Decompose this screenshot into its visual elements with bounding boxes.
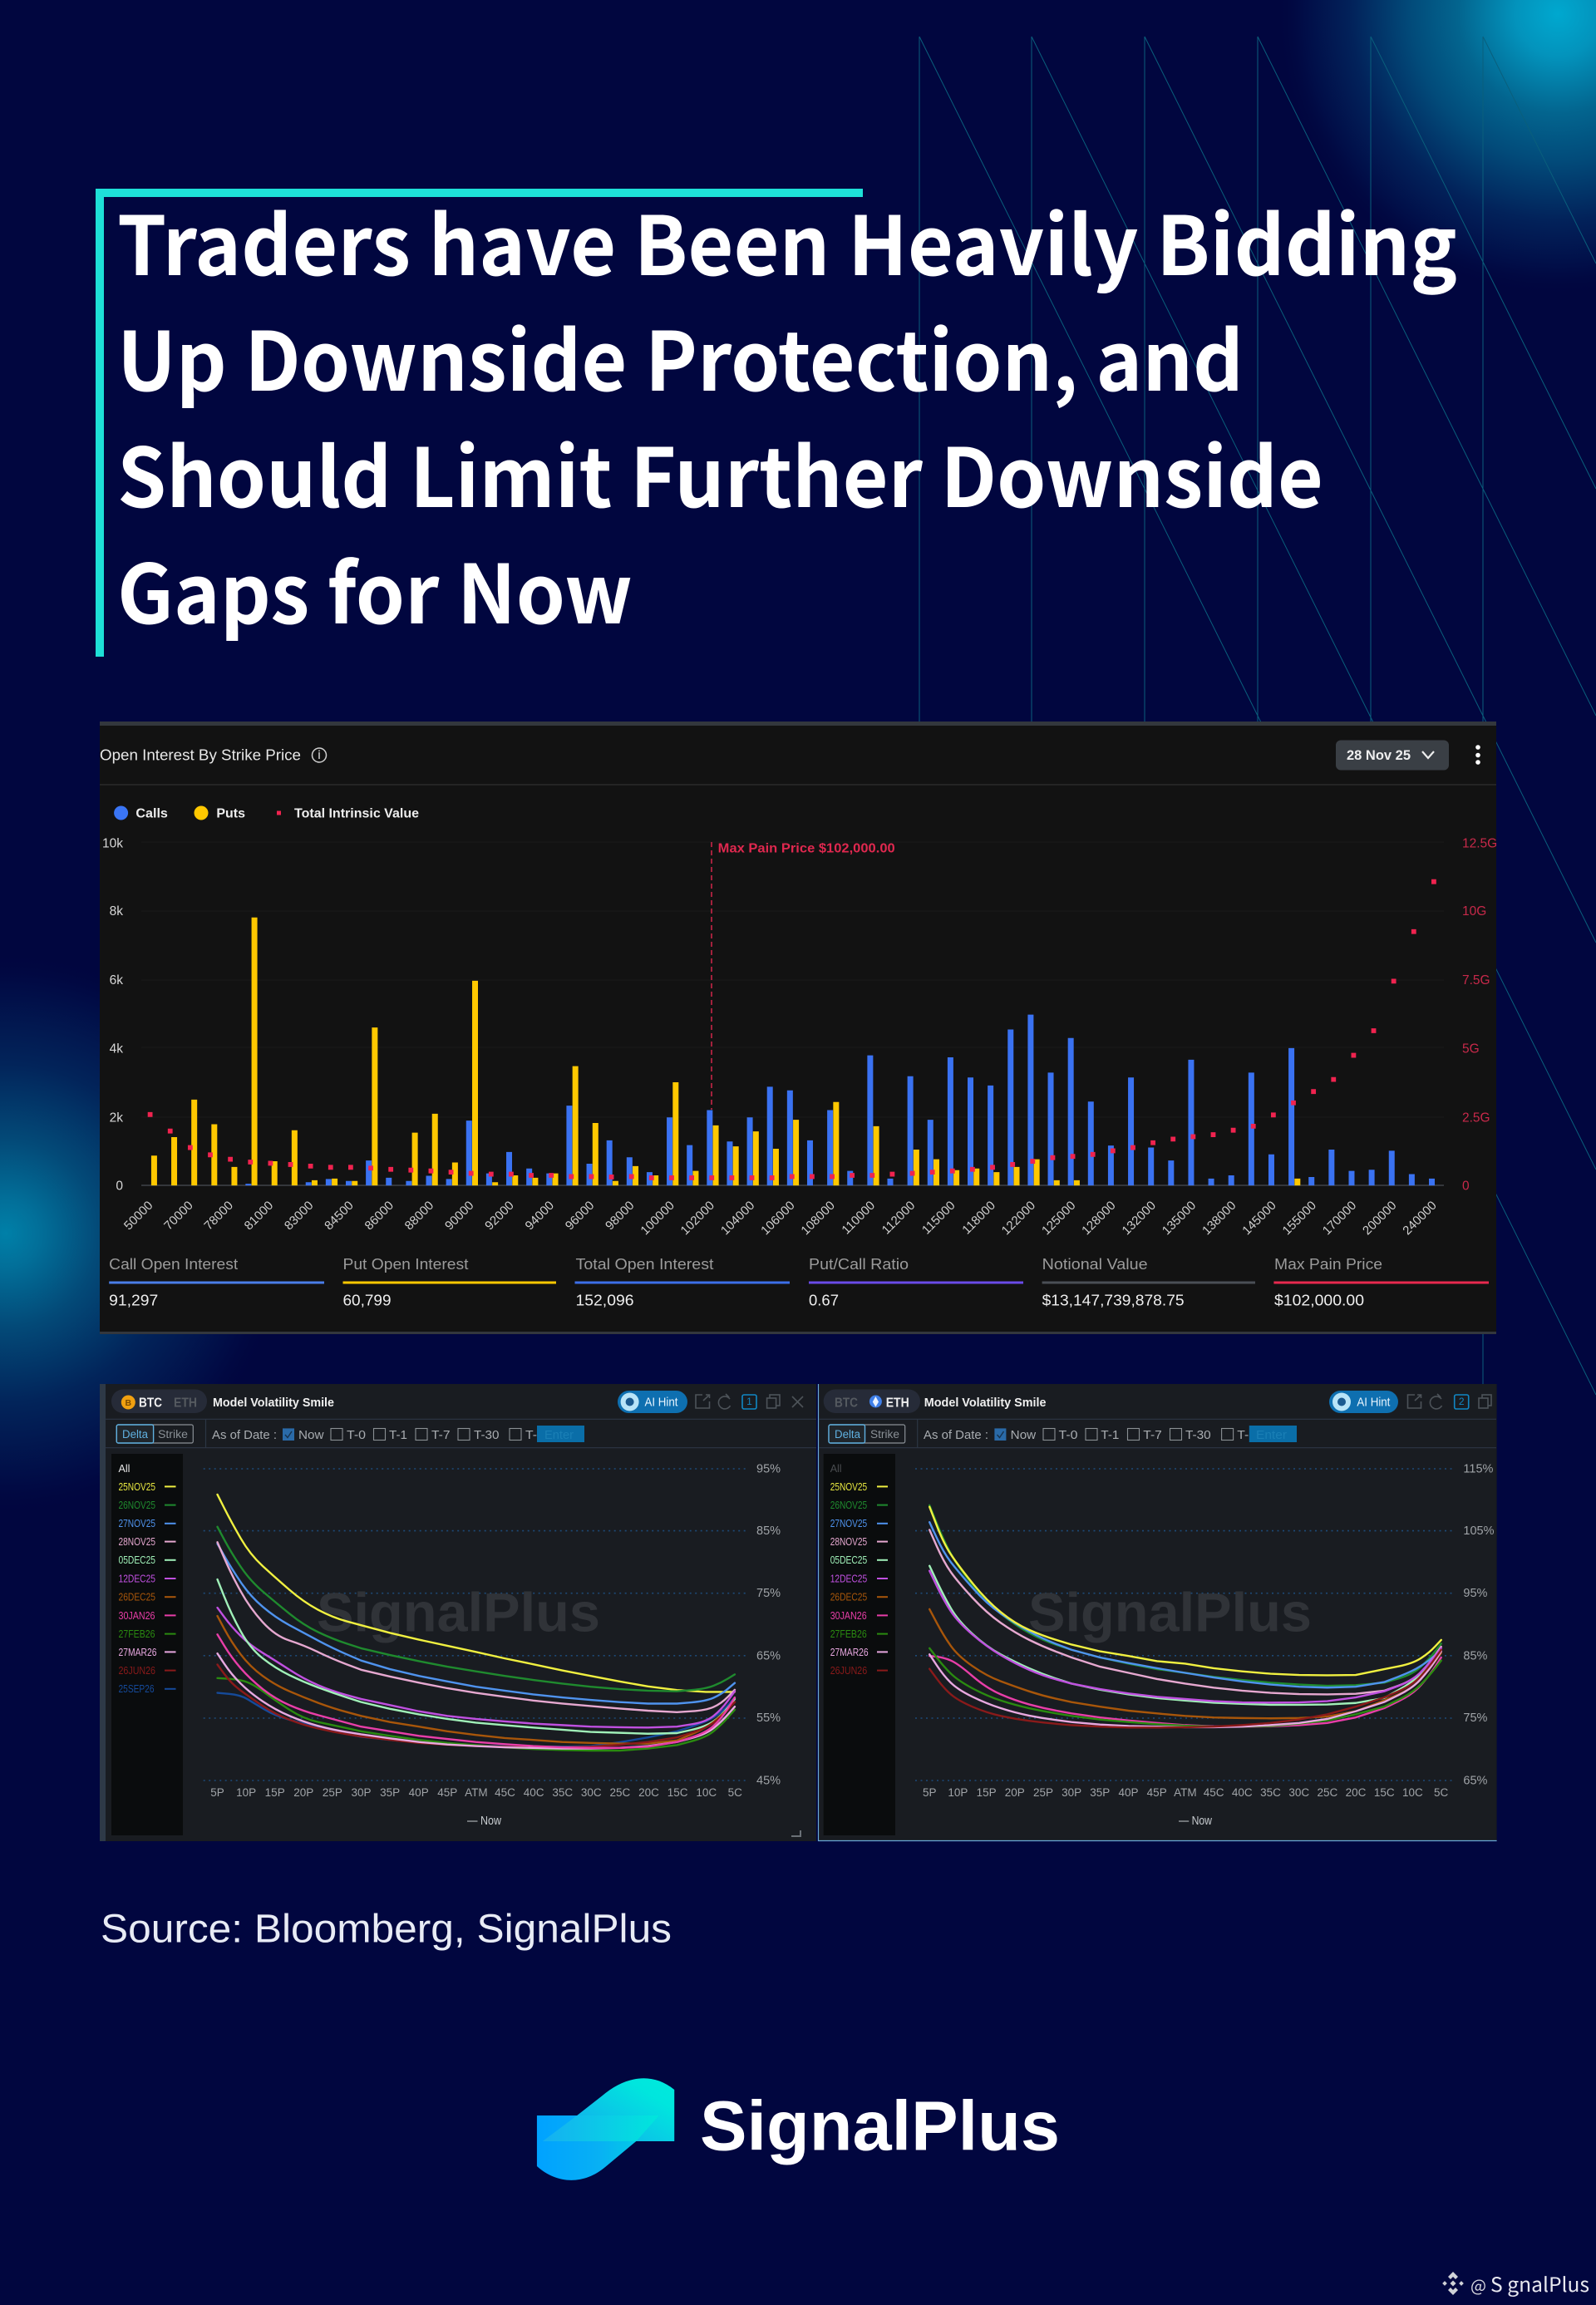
- expiry legend: 26JUN26: [830, 1665, 867, 1677]
- x axis delta labels: 5C: [728, 1786, 742, 1799]
- expiry legend: 25NOV25: [830, 1481, 867, 1493]
- x axis delta labels: 10P: [236, 1786, 256, 1799]
- x axis strike labels: 240000: [1400, 1199, 1440, 1238]
- x axis delta labels: 25P: [323, 1786, 342, 1799]
- x axis strike labels: 155000: [1280, 1199, 1319, 1238]
- y axis labels: contracts: 2k: [110, 1111, 123, 1125]
- expiry legend: 25NOV25: [118, 1481, 155, 1493]
- delta strike toggle: Delta: [122, 1428, 148, 1441]
- stat: notional value: $13,147,739,878.75: [1042, 1292, 1185, 1308]
- as of date controls: T-30: [1185, 1429, 1211, 1442]
- y axis labels: contracts: 10k: [102, 836, 123, 851]
- as of date controls: T-1: [389, 1429, 407, 1442]
- x axis delta labels: 45C: [495, 1786, 515, 1799]
- x axis strike labels: 84500: [322, 1199, 357, 1233]
- panel heading: Open Interest By Strike Price: [100, 746, 301, 763]
- x axis strike labels: 200000: [1360, 1199, 1400, 1238]
- as of date controls: [924, 1426, 1297, 1442]
- x axis delta labels: 10P: [948, 1786, 968, 1799]
- expiry legend: 27MAR26: [830, 1647, 869, 1658]
- stat: call open interest: [109, 1255, 324, 1308]
- stat: max pain price: $102,000.00: [1274, 1292, 1364, 1308]
- stat: notional value: [1042, 1255, 1255, 1308]
- window control icons: [1408, 1394, 1491, 1409]
- x axis strike labels: 135000: [1160, 1199, 1199, 1238]
- x axis delta labels: 35P: [380, 1786, 400, 1799]
- x axis delta labels: [923, 1786, 1448, 1799]
- stat: put open interest: [342, 1255, 556, 1308]
- x axis delta labels: 25P: [1033, 1786, 1053, 1799]
- call bars: [249, 1015, 1432, 1185]
- x axis delta labels: 30C: [581, 1786, 602, 1799]
- total intrinsic value markers: [150, 879, 1434, 1180]
- as of date controls: T-7: [431, 1429, 451, 1442]
- x axis delta labels: 30P: [1062, 1786, 1081, 1799]
- x axis delta labels: 5P: [923, 1786, 936, 1799]
- expiry legend: 28NOV25: [118, 1536, 155, 1548]
- y axis labels: intrinsic value: [1462, 836, 1497, 1194]
- title: Traders have Been Heavily Bidding: [117, 181, 1457, 299]
- icon: logo mark: [537, 2078, 674, 2180]
- handle text: @: [1470, 2273, 1486, 2297]
- expiry legend: 28NOV25: [830, 1536, 867, 1548]
- line chart: ETH smile: [915, 1463, 1495, 1828]
- as of date controls: As of Date :: [924, 1429, 988, 1442]
- BTC ETH toggle: B: [126, 1398, 132, 1408]
- icon: info: [313, 748, 326, 762]
- panel heading: Model Volatility Smile: [213, 1396, 334, 1410]
- as of date controls: As of Date :: [212, 1429, 277, 1442]
- expiry legend: 30JAN26: [118, 1610, 155, 1622]
- chart legend: Calls: [135, 806, 168, 821]
- expiry legend: 27FEB26: [118, 1628, 155, 1640]
- x axis strike labels: 78000: [201, 1199, 236, 1233]
- as of date controls: Now: [298, 1429, 324, 1442]
- y axis labels: intrinsic value: 0: [1462, 1179, 1470, 1194]
- y axis labels: intrinsic value: 12.5G: [1462, 836, 1497, 851]
- watermark: SignalPlus: [1028, 1582, 1312, 1643]
- x axis delta labels: ATM: [1174, 1786, 1197, 1799]
- as of date controls: T-1: [1101, 1429, 1119, 1442]
- max pain marker: Max Pain Price $102,000.00: [718, 841, 895, 856]
- x axis delta labels: 35P: [1090, 1786, 1110, 1799]
- chart legend: [114, 806, 419, 821]
- corner handle watermark: S gnalPlus: [1490, 2268, 1589, 2298]
- icon: kebab menu: [1475, 745, 1480, 765]
- stat: put open interest: 60,799: [342, 1292, 391, 1308]
- expiry legend: 25SEP26: [118, 1683, 155, 1695]
- AI hint button: [1329, 1391, 1398, 1413]
- expiry legend: 27FEB26: [830, 1628, 867, 1640]
- stat: call open interest: Call Open Interest: [109, 1255, 238, 1273]
- x axis delta labels: 40P: [1118, 1786, 1139, 1799]
- stat: total open interest: Total Open Interest: [575, 1255, 713, 1273]
- expiry legend: All: [118, 1463, 130, 1475]
- as of date controls: T-: [1237, 1429, 1249, 1442]
- as of date controls: T-30: [474, 1429, 499, 1442]
- expiry legend: 30JAN26: [830, 1610, 867, 1622]
- x axis strike labels: 50000: [121, 1199, 155, 1233]
- delta strike toggle: [829, 1425, 905, 1443]
- watermark: SignalPlus: [317, 1582, 600, 1643]
- x axis delta labels: 15P: [265, 1786, 285, 1799]
- x axis strike labels: 128000: [1079, 1199, 1119, 1238]
- x axis strike labels: 100000: [638, 1199, 677, 1238]
- x axis strike labels: 92000: [482, 1199, 517, 1233]
- x axis strike labels: 125000: [1039, 1199, 1078, 1238]
- y axis labels: intrinsic value: 7.5G: [1462, 973, 1490, 988]
- title: Gaps for Now: [117, 529, 633, 648]
- expiry legend: [111, 1454, 183, 1835]
- stat: put call ratio: [809, 1255, 1023, 1308]
- x axis delta labels: 20C: [1346, 1786, 1367, 1799]
- chart legend: Total Intrinsic Value: [294, 806, 419, 821]
- x axis strike labels: 122000: [999, 1199, 1038, 1238]
- BTC ETH toggle: [824, 1390, 920, 1413]
- as of date controls: T-0: [347, 1429, 366, 1442]
- x axis delta labels: 5C: [1434, 1786, 1448, 1799]
- y axis labels: 75%: [1463, 1712, 1488, 1725]
- x axis delta labels: 15P: [977, 1786, 997, 1799]
- x axis strike labels: 115000: [919, 1199, 958, 1237]
- x axis delta labels: 35C: [552, 1786, 573, 1799]
- y axis labels: 105%: [1463, 1524, 1495, 1538]
- expiry legend: All: [830, 1463, 842, 1475]
- stat: put call ratio: 0.67: [809, 1292, 839, 1308]
- x axis delta labels: 20C: [638, 1786, 659, 1799]
- x axis strike labels: 98000: [603, 1199, 638, 1233]
- y axis labels: 95%: [1463, 1587, 1488, 1600]
- stat: total open interest: [575, 1255, 790, 1308]
- x axis strike labels: 94000: [523, 1199, 557, 1233]
- date dropdown: 28 Nov 25: [1347, 748, 1411, 763]
- x axis delta labels: 45P: [1147, 1786, 1167, 1799]
- stat: put call ratio: Put/Call Ratio: [809, 1255, 909, 1273]
- panel: ETH model volatility smile: [818, 1384, 1497, 1841]
- date dropdown: [1336, 740, 1449, 770]
- expiry legend: 26NOV25: [830, 1500, 867, 1511]
- smile curves: [929, 1505, 1441, 1727]
- as of date controls: T-0: [1059, 1429, 1077, 1442]
- title: Should Limit Further Downside: [117, 413, 1323, 531]
- expiry legend: [824, 1454, 895, 1835]
- BTC ETH toggle: ETH: [174, 1396, 197, 1410]
- expiry legend: 26JUN26: [118, 1665, 155, 1677]
- as of date controls: T-: [525, 1429, 537, 1442]
- expiry legend: 26DEC25: [118, 1591, 155, 1603]
- y axis labels: contracts: 6k: [110, 973, 123, 988]
- y axis labels: intrinsic value: 2.5G: [1462, 1111, 1490, 1125]
- bar chart: open interest: [102, 836, 1497, 1238]
- x axis strike labels: 88000: [402, 1199, 436, 1233]
- y axis labels: contracts: [102, 836, 123, 1194]
- y axis labels: 55%: [756, 1712, 781, 1725]
- x axis delta labels: 40C: [1232, 1786, 1253, 1799]
- x axis delta labels: 30C: [1288, 1786, 1309, 1799]
- x axis strike labels: 104000: [718, 1199, 757, 1238]
- delta strike toggle: [116, 1425, 193, 1443]
- x axis delta labels: ATM: [465, 1786, 488, 1799]
- panel: BTC model volatility smile: [100, 1384, 816, 1841]
- stat: max pain price: Max Pain Price: [1274, 1255, 1382, 1273]
- x axis strike labels: 170000: [1320, 1199, 1359, 1238]
- stat: put open interest: Put Open Interest: [342, 1255, 469, 1273]
- x axis delta labels: 20P: [1005, 1786, 1025, 1799]
- y axis labels: 95%: [756, 1463, 781, 1476]
- chart legend: now: — Now: [467, 1815, 501, 1828]
- expiry legend: 26DEC25: [830, 1591, 867, 1603]
- x axis strike labels: 83000: [282, 1199, 316, 1233]
- y axis labels: 75%: [756, 1587, 781, 1600]
- x axis strike labels: 108000: [798, 1199, 838, 1238]
- stat: notional value: Notional Value: [1042, 1255, 1148, 1273]
- window control icons: [696, 1394, 803, 1409]
- x axis delta labels: 40P: [409, 1786, 429, 1799]
- icon: binance diamond: [1442, 2272, 1464, 2295]
- as of date controls: [212, 1426, 584, 1442]
- AI hint button: AI Hint: [1357, 1396, 1390, 1410]
- source note: Source: Bloomberg, SignalPlus: [101, 1908, 672, 1952]
- x axis delta labels: [210, 1786, 742, 1799]
- expiry legend: 12DEC25: [830, 1573, 867, 1584]
- stat: max pain price: [1273, 1255, 1489, 1308]
- delta strike toggle: Strike: [158, 1428, 188, 1441]
- as of date controls: Enter: [1256, 1429, 1287, 1442]
- title block with bracket: [96, 181, 1457, 657]
- x axis delta labels: 20P: [293, 1786, 313, 1799]
- y axis labels: contracts: 8k: [110, 904, 123, 919]
- x axis strike labels: 86000: [362, 1199, 397, 1233]
- resize handle: [791, 1830, 800, 1836]
- chart legend: Puts: [216, 806, 245, 821]
- x axis delta labels: 25C: [610, 1786, 631, 1799]
- y axis labels: 65%: [1463, 1774, 1488, 1787]
- y axis labels: [1463, 1463, 1495, 1787]
- x axis strike labels: 118000: [959, 1199, 998, 1237]
- line chart: BTC smile: [204, 1463, 781, 1828]
- x axis delta labels: 15C: [667, 1786, 688, 1799]
- panel: ETH model volatility smile: 2: [1459, 1396, 1465, 1407]
- y axis labels: [756, 1463, 781, 1787]
- x axis strike labels: 145000: [1239, 1199, 1279, 1238]
- expiry legend: 27NOV25: [830, 1518, 867, 1529]
- delta strike toggle: Delta: [835, 1428, 860, 1441]
- summary statistics row: [109, 1255, 1489, 1308]
- expiry legend: 27NOV25: [118, 1518, 155, 1529]
- BTC ETH toggle: [111, 1390, 207, 1413]
- panel: open interest by strike price: [100, 722, 1497, 1334]
- x axis delta labels: 10C: [696, 1786, 717, 1799]
- expiry legend: 12DEC25: [118, 1573, 155, 1584]
- x axis delta labels: 15C: [1374, 1786, 1395, 1799]
- expiry legend: 05DEC25: [830, 1554, 867, 1566]
- BTC ETH toggle: ETH: [886, 1396, 909, 1410]
- chart legend: now: — Now: [1179, 1815, 1212, 1828]
- expiry legend: 26NOV25: [118, 1500, 155, 1511]
- AI hint button: AI Hint: [645, 1396, 678, 1410]
- x axis strike labels: 138000: [1199, 1199, 1239, 1238]
- x axis delta labels: 30P: [351, 1786, 372, 1799]
- x axis strike labels: 106000: [758, 1199, 798, 1238]
- x axis strike labels: 70000: [161, 1199, 196, 1233]
- x axis strike labels: 110000: [839, 1199, 878, 1237]
- expiry legend: 05DEC25: [118, 1554, 155, 1566]
- x axis delta labels: 35C: [1260, 1786, 1281, 1799]
- title: Up Downside Protection, and: [117, 297, 1244, 415]
- x axis strike labels: 81000: [242, 1199, 276, 1233]
- as of date controls: Enter: [544, 1429, 574, 1442]
- as of date controls: Now: [1011, 1429, 1037, 1442]
- BTC ETH toggle: BTC: [139, 1396, 162, 1410]
- y axis labels: intrinsic value: 5G: [1462, 1042, 1480, 1056]
- x axis strike labels: 132000: [1120, 1199, 1159, 1238]
- as of date controls: T-7: [1143, 1429, 1162, 1442]
- stat: total open interest: 152,096: [575, 1292, 633, 1308]
- x axis strike labels: 102000: [678, 1199, 717, 1238]
- x axis strike labels: 112000: [879, 1199, 918, 1237]
- x axis delta labels: 45C: [1204, 1786, 1224, 1799]
- title bracket: [96, 189, 863, 657]
- BTC ETH toggle: BTC: [835, 1396, 858, 1410]
- y axis labels: contracts: 4k: [110, 1042, 123, 1056]
- AI hint button: [618, 1391, 687, 1413]
- x axis delta labels: 45P: [437, 1786, 457, 1799]
- x axis strike labels: [121, 1199, 1440, 1238]
- y axis labels: 85%: [756, 1524, 781, 1538]
- stat: call open interest: 91,297: [109, 1292, 158, 1308]
- y axis labels: contracts: 0: [116, 1179, 123, 1194]
- put bars: [154, 918, 1298, 1185]
- y axis labels: 115%: [1463, 1463, 1494, 1476]
- panel: BTC model volatility smile: 1: [746, 1396, 752, 1407]
- y axis labels: 85%: [1463, 1649, 1488, 1662]
- delta strike toggle: Strike: [870, 1428, 899, 1441]
- x axis strike labels: 96000: [563, 1199, 597, 1233]
- panel heading: Model Volatility Smile: [924, 1396, 1046, 1410]
- y axis labels: 65%: [756, 1649, 781, 1662]
- x axis strike labels: 90000: [442, 1199, 477, 1233]
- corner handle watermark: [1442, 2268, 1589, 2298]
- y axis labels: intrinsic value: 10G: [1462, 904, 1486, 919]
- SignalPlus logo: [537, 2078, 1060, 2180]
- expiry legend: 27MAR26: [118, 1647, 157, 1658]
- logo wordmark: SignalPlus: [700, 2087, 1060, 2165]
- y axis labels: 45%: [756, 1774, 781, 1787]
- x axis delta labels: 25C: [1318, 1786, 1338, 1799]
- x axis delta labels: 10C: [1402, 1786, 1423, 1799]
- x axis delta labels: 40C: [524, 1786, 544, 1799]
- smile curves: [218, 1495, 735, 1751]
- x axis delta labels: 5P: [210, 1786, 224, 1799]
- title: [117, 181, 1457, 648]
